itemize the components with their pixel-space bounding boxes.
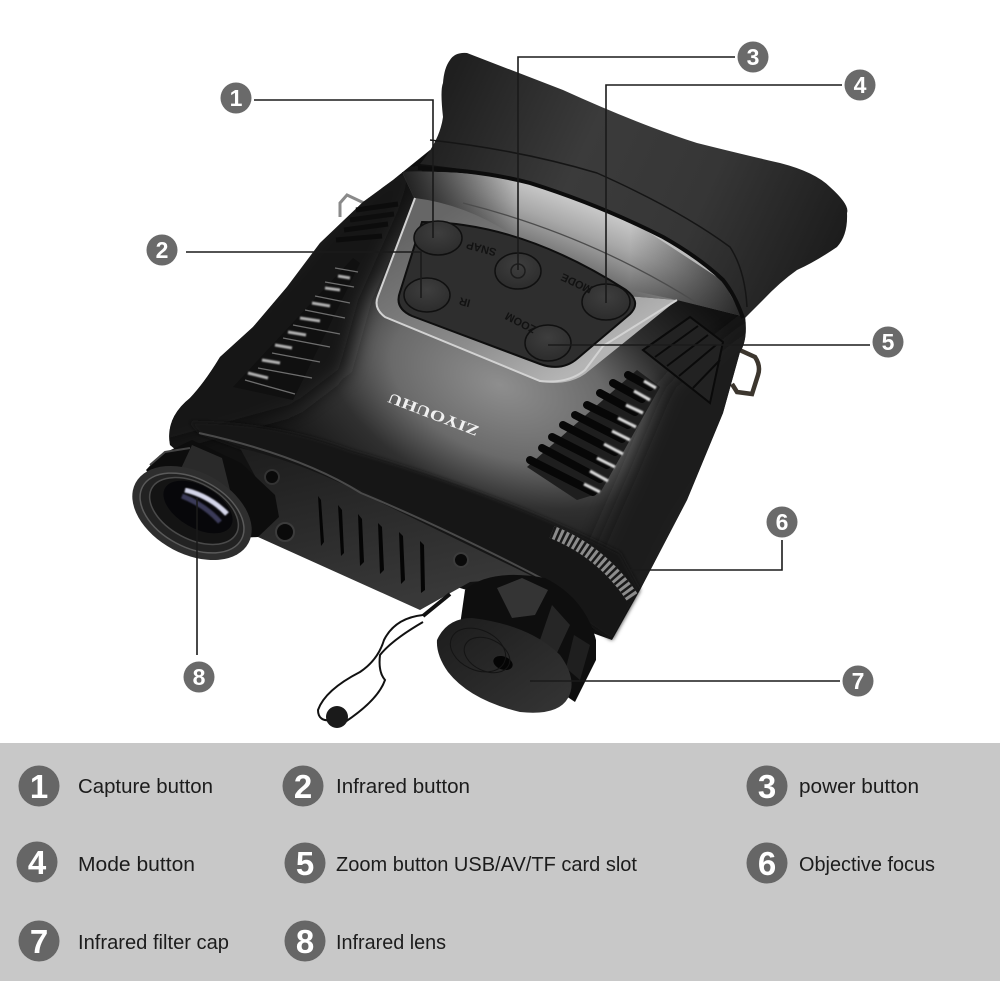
leader line 4 xyxy=(606,85,842,303)
body shadows xyxy=(150,165,760,610)
callout badge 8: 8 xyxy=(193,664,206,690)
callout badge 6: 6 xyxy=(776,509,788,535)
legend item 8: Infrared lens xyxy=(336,932,446,954)
legend item 7 xyxy=(18,920,229,962)
callout badge 4 xyxy=(844,70,876,100)
legend item 3 xyxy=(746,766,919,806)
front dark strip xyxy=(190,422,640,640)
legend item 6 xyxy=(746,842,935,884)
callout badge 5 xyxy=(872,326,904,358)
leader line 8 xyxy=(196,498,198,655)
legend item 5: 5 xyxy=(296,845,314,882)
main body xyxy=(169,150,746,640)
legend item 7: Infrared filter cap xyxy=(78,932,229,954)
eyecup base lines xyxy=(418,140,747,318)
rear knurled ring of lens xyxy=(146,440,279,540)
legend item 2: 2 xyxy=(294,768,312,805)
legend item 1: 1 xyxy=(30,768,48,805)
left lower vents xyxy=(233,258,360,400)
right side shadow xyxy=(603,318,746,605)
button text: MODE: MODE xyxy=(559,270,594,295)
callout badge 5: 5 xyxy=(882,329,895,355)
legend item 6: 6 xyxy=(758,845,776,882)
legend item 7: 7 xyxy=(30,923,48,960)
lanyard xyxy=(318,594,450,728)
legend item 4 xyxy=(16,842,195,882)
knurled ring behind cap xyxy=(460,575,596,702)
leader line 2 xyxy=(186,252,421,298)
right vents xyxy=(527,370,660,500)
capture button xyxy=(414,221,462,255)
infrared button xyxy=(404,278,450,312)
legend item 3: power button xyxy=(799,776,919,798)
button text: ZOOM: ZOOM xyxy=(504,309,538,335)
callout badge 3 xyxy=(738,42,768,72)
legend item 1 xyxy=(18,766,213,806)
infrared lens xyxy=(116,447,268,579)
legend item 2: Infrared button xyxy=(336,776,470,798)
strap loop left xyxy=(340,195,364,217)
control panel xyxy=(398,221,635,367)
legend item 4: Mode button xyxy=(78,854,195,876)
callout badge 7: 7 xyxy=(852,668,864,694)
eyecup xyxy=(420,53,847,318)
callout badge 7 xyxy=(842,666,874,696)
legend item 8: 8 xyxy=(296,923,314,960)
callout badge 4: 4 xyxy=(854,72,867,98)
legend item 5 xyxy=(284,842,637,884)
leader line 1 xyxy=(254,100,433,238)
legend panel background xyxy=(0,743,1000,981)
lanyard bead xyxy=(326,706,348,728)
mode button xyxy=(582,284,630,320)
device: night vision binocular xyxy=(116,53,847,728)
strap loop right xyxy=(732,347,759,394)
legend item 2 xyxy=(282,766,470,806)
legend item 8 xyxy=(284,920,446,962)
legend item 6: Objective focus xyxy=(799,854,935,876)
button text: IR: IR xyxy=(458,294,472,309)
callout badge 1: 1 xyxy=(230,85,243,111)
leader line 3 xyxy=(518,57,735,270)
callout badge 2: 2 xyxy=(156,237,168,263)
leader line 5 xyxy=(548,344,870,346)
upper right vents xyxy=(643,317,723,403)
legend item 3: 3 xyxy=(758,768,776,805)
legend item 1: Capture button xyxy=(78,776,213,798)
callout badge 8 xyxy=(184,662,214,692)
leader line 7 xyxy=(530,680,840,682)
callout badge 2 xyxy=(146,234,178,266)
silver band under eyecup xyxy=(402,172,742,316)
control panel bezel xyxy=(376,198,677,383)
power button xyxy=(495,253,541,289)
button text: SNAP: SNAP xyxy=(465,238,498,258)
bezel highlights xyxy=(377,198,677,382)
front lower plate xyxy=(240,448,534,610)
focus wheel xyxy=(552,532,632,597)
left side shadow xyxy=(150,165,420,450)
front plate slits xyxy=(318,496,425,593)
leader line 6 xyxy=(630,540,782,570)
brand name: ZIYOUHU xyxy=(386,389,481,438)
left upper vents xyxy=(336,204,398,240)
callout badge 1 xyxy=(220,82,252,114)
zoom button xyxy=(525,325,571,361)
legend item 5: Zoom button USB/AV/TF card slot xyxy=(336,854,637,876)
infrared filter cap xyxy=(437,618,572,713)
legend item 4: 4 xyxy=(28,844,47,881)
callout badge 6 xyxy=(766,506,798,538)
callout badge 3: 3 xyxy=(747,44,759,70)
